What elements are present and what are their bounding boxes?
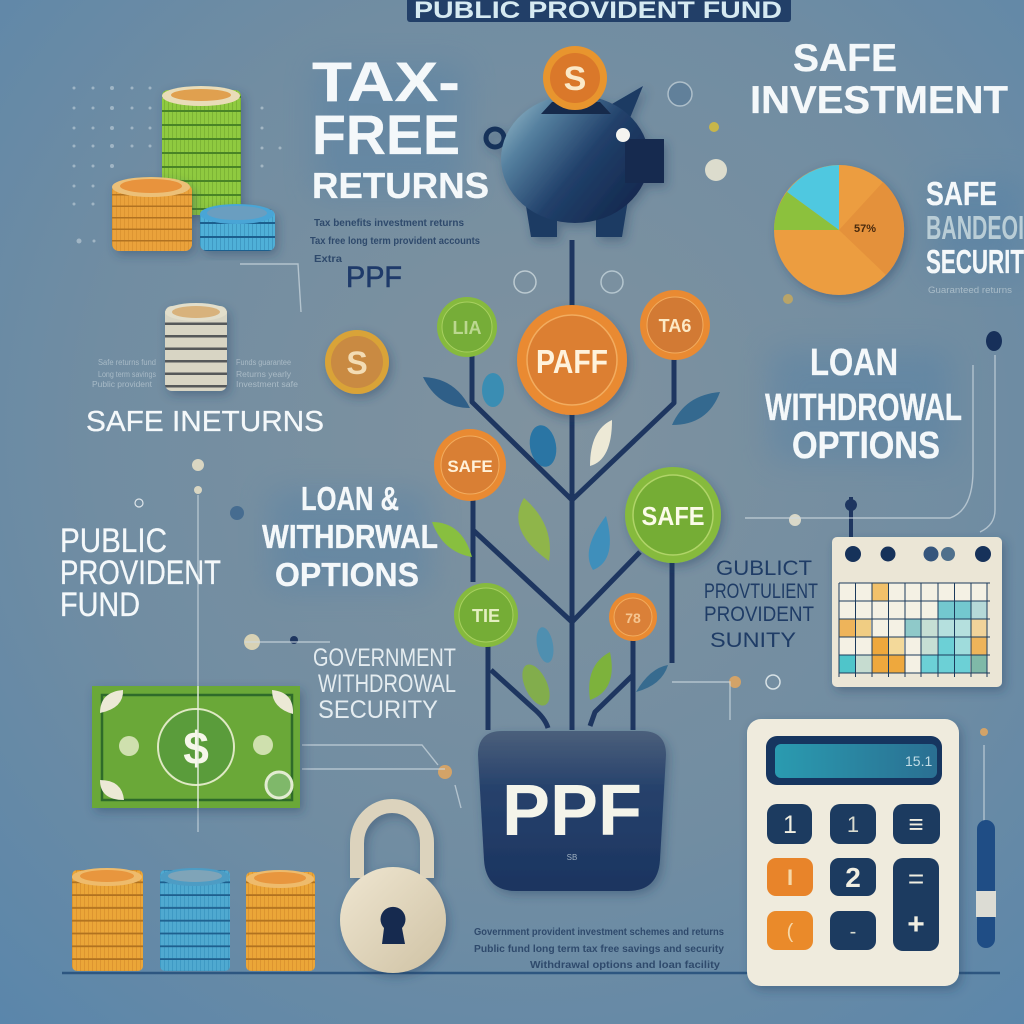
icon: orange coin stack [112,177,192,251]
node: green lower [454,583,518,647]
icon: calculator: 15.1 [905,753,932,769]
icon: gold coin: S [564,60,586,98]
icon: banknote [92,686,300,808]
decorative rings and markers [135,82,1002,779]
text halos [270,65,1024,590]
icon: padlock [340,806,446,973]
text: provident summary [704,557,818,652]
node: orange lower [609,593,657,641]
text: provident summary: PROVTULIENT [704,580,818,603]
heading: tax-free returns: TAX- [312,50,460,113]
heading: safe investment [750,37,1008,122]
text: safe security right [926,175,1024,295]
text: provident summary: SUNITY [710,629,796,652]
icon: gold coin [543,46,607,110]
tree branches [472,240,674,730]
illustration: money tree [423,240,721,730]
small text: safe returns note: Safe returns fund [98,358,156,367]
heading: public provident fund: PROVIDENT [60,554,221,592]
decorative dots [72,86,282,244]
icon: calendar [832,537,1002,687]
text: provident summary: GUBLICT [716,557,812,580]
heading: public provident fund: PUBLIC [60,522,167,560]
text: safe security right: Guaranteed returns [928,285,1013,295]
icon: calculator: = [908,863,924,894]
heading: government withdrawal security: WITHDROWAL [318,670,456,698]
small text: bottom description: Withdrawal options and loan facility [530,960,720,971]
node: SAFE orange: SAFE [447,457,493,476]
icon: calculator: 1 [783,811,797,839]
PPF pot [478,731,666,891]
icon: calculator: + [907,908,925,941]
icon: banknote: $ [183,722,209,774]
icon: S coin: S [346,345,368,381]
icon: calculator: ≡ [908,809,924,839]
icon: calculator [747,719,959,986]
icon: bottom orange stack [72,868,143,971]
icon: pen [976,820,996,948]
heading: safe inreturns: SAFE INETURNS [86,406,324,438]
heading: tax-free returns: RETURNS [312,165,489,206]
node: PAFF [517,305,627,415]
node: green small top: LIA [452,318,482,338]
icon: bottom orange stack two [246,870,315,971]
node: SAFE green: SAFE [642,501,704,531]
icon: silver coin stack [165,303,227,391]
heading: loan and withdrawal options: WITHDRWAL [262,518,438,555]
heading: loan withdrawal options right: LOAN [810,342,898,384]
text: safe security right: SAFE [926,175,997,212]
heading: tax-free returns: FREE [312,103,460,166]
heading: loan and withdrawal options [262,480,438,593]
small text: bottom description [474,927,724,971]
small text: bottom description: Government provident investment schemes and returns [474,927,724,938]
node: SAFE orange [434,429,506,501]
baseline [62,972,1000,974]
calendar coloured cells [839,583,987,673]
icon: calculator: 1 [847,812,859,837]
small text: safe returns note: Investment safe [236,380,299,389]
small text: safe returns note: Long term savings [98,370,156,379]
chart: pie [774,165,904,295]
node: orange top right: TA6 [659,316,691,336]
small text: safe returns note: Funds guarantee [236,358,291,367]
icon: bottom blue stack [160,868,230,971]
node: green small top [437,297,497,357]
heading: tax-free returns [312,50,489,206]
PPF pot: SB [567,853,577,862]
icon: piggy bank [486,86,664,237]
small text: safe returns note: Public provident [92,380,153,389]
PPF pot: PPF [502,771,642,851]
icon: calculator: ( [787,921,794,943]
icon: blue coin stack [200,204,275,251]
node: SAFE green [625,467,721,563]
connector lines [198,264,995,832]
node: green lower: TIE [472,606,500,626]
small text: tax-free description: Extra [314,254,342,265]
small text: safe returns note [92,358,299,389]
text: provident summary: PROVIDENT [704,603,814,626]
heading: safe investment: INVESTMENT [750,79,1008,122]
heading: loan withdrawal options right: WITHDROWAL [765,387,962,429]
small text: tax-free description: PPF [346,261,402,294]
icon: calculator: - [850,921,856,943]
heading: safe investment: SAFE [793,37,897,80]
small text: safe returns note: Returns yearly [236,370,291,379]
node: orange top right [640,290,710,360]
small text: tax-free description [310,218,480,294]
icon: S coin [325,330,389,394]
node: PAFF: PAFF [536,343,608,380]
heading: government withdrawal security: SECURITY [318,696,438,724]
heading: loan withdrawal options right: OPTIONS [792,425,940,467]
heading: public provident fund [60,522,221,624]
heading: public provident fund: FUND [60,586,140,624]
icon: calculator: 2 [845,862,861,893]
heading: government withdrawal security [313,644,456,724]
chart: pie: 57% [854,223,876,235]
node: orange lower: 78 [625,610,641,626]
small text: tax-free description: Tax free long term provident accounts [310,236,480,247]
heading: government withdrawal security: GOVERNMENT [313,644,456,672]
icon: green coin stack [162,86,241,215]
heading: loan and withdrawal options: LOAN & [301,480,399,517]
small text: bottom description: Public fund long term tax free savings and security [474,944,724,955]
heading: loan and withdrawal options: OPTIONS [275,556,419,593]
tree leaves [423,373,720,710]
icon: calculator: I [787,865,793,890]
heading: loan withdrawal options right [765,342,962,467]
small text: tax-free description: Tax benefits investment returns [314,218,464,229]
